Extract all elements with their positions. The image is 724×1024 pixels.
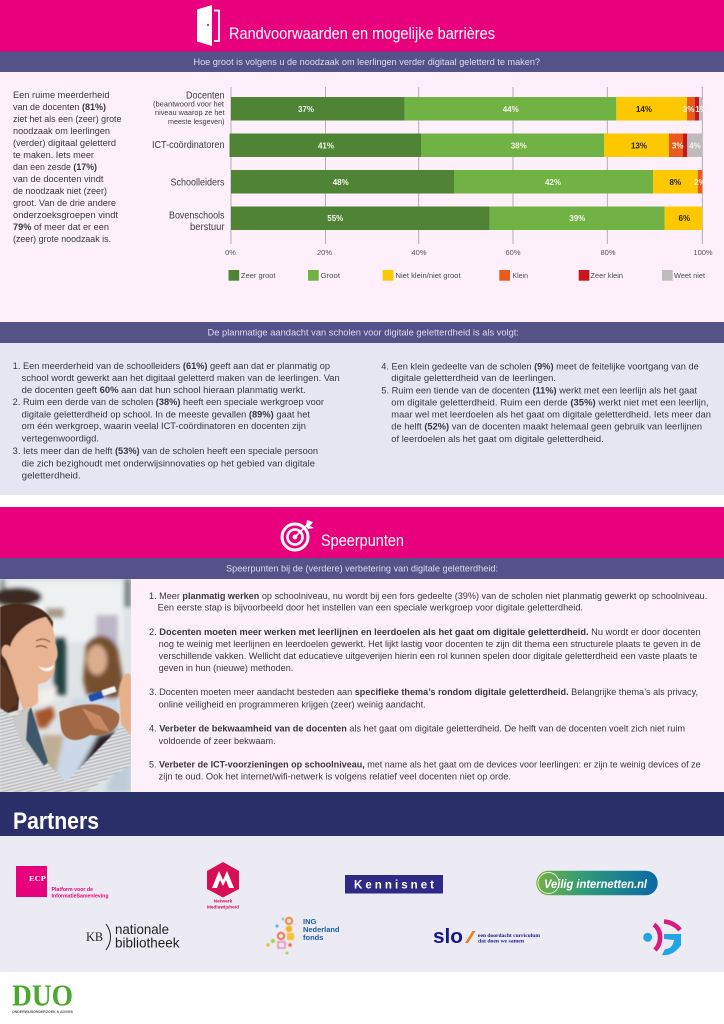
text block: points 1 to 3: digitale geletterdheid op school. In de meeste gevallen (89%) gaat het bbox=[22, 409, 311, 419]
bar: Docenten: 3% bbox=[683, 105, 694, 114]
icon: target with arrow bbox=[282, 520, 314, 550]
logo: Netwerk Mediawijsheid: Mediawijsheid bbox=[207, 904, 239, 910]
header: Partners bbox=[0, 792, 724, 836]
logo: Kennisnet: Kennisnet bbox=[354, 880, 434, 892]
bar: Docenten: 14% bbox=[636, 105, 652, 114]
text block: points 1 to 3: 3. Iets meer dan de helft (53%) van de scholen heeft een speciale persoon bbox=[13, 446, 318, 456]
text block: introduction: van de docenten (81%) bbox=[13, 102, 106, 112]
legend: Weet niet bbox=[674, 271, 706, 280]
point 1: Een eerste stap is bijvoorbeeld door het instellen van een speciale werkgroep voor digitale geletterdheid. bbox=[158, 603, 583, 613]
axis labels: 100% bbox=[693, 248, 713, 257]
point 3: 3. Docenten moeten meer aandacht besteden aan specifieke thema’s rondom digitale geletterdheid. Belangrijke thema’s als privacy, bbox=[149, 687, 698, 697]
bar: Docenten: 44% bbox=[503, 105, 519, 114]
subheading band: speerpunten bbox=[0, 558, 724, 579]
text block: points 4 and 5: of leerdoelen als het gaat om digitale geletterdheid. bbox=[391, 434, 604, 444]
row labels: meeste lesgeven) bbox=[168, 117, 225, 126]
panel: partner logos bbox=[0, 836, 724, 972]
heading: Randvoorwaarden en mogelijke barrières bbox=[229, 24, 495, 43]
text block: points 4 and 5: de helft (52%) van de docenten maakt helemaal geen gebruik van leerlijnen bbox=[391, 422, 702, 432]
axis labels: 60% bbox=[505, 248, 521, 257]
logo: ECP: Platform voor de bbox=[52, 887, 93, 893]
legend: Niet klein/niet groot bbox=[396, 271, 461, 280]
legend bbox=[228, 270, 706, 281]
text block: points 1 to 3: om één werkgroep, waarin veelal ICT-coördinatoren en docenten zijn bbox=[22, 421, 306, 431]
text block: points 4 and 5: maar wel met leerdoelen als het gaat om digitale geletterdheid. Iets meer dan bbox=[391, 409, 711, 419]
point 4: voldoende of zeer bekwaam. bbox=[159, 736, 276, 746]
row labels: niveau waarop ze het bbox=[155, 108, 225, 117]
photo: smiling student writing with a marker bbox=[0, 579, 131, 792]
axis labels: 0% bbox=[225, 248, 236, 257]
logo: Netwerk Mediawijsheid bbox=[207, 862, 239, 910]
point 5: zijn te oud. Ook het internet/wifi-netwerk is volgens relatief veel docenten niet op orde. bbox=[159, 772, 511, 782]
logo: ECP: InformatieSamenleving bbox=[52, 894, 109, 900]
text block: introduction: onderzoeksgroepen vindt bbox=[13, 210, 119, 220]
logo: Netwerk Mediawijsheid: Netwerk bbox=[214, 898, 233, 904]
point 3: online veiligheid en programmeren krijgen (zeer) weinig aandacht. bbox=[159, 699, 426, 709]
text block: introduction: (zeer) grote noodzaak is. bbox=[13, 234, 111, 244]
point 5: 5. Verbeter de ICT-voorzieningen op schoolniveau, met name als het gaat om de devices voor leerlingen: er zijn te weinig devices of ze bbox=[149, 760, 701, 770]
text block: points 4 and 5: 5. Ruim een tiende van de docenten (11%) werkt met een leerlijn als het gaat bbox=[381, 386, 698, 396]
logo: KB nationale bibliotheek: KB bbox=[86, 929, 103, 944]
subheading band: question: Hoe groot is volgens u de noodzaak om leerlingen verder digitaal geletterd te maken? bbox=[194, 57, 540, 68]
main girl bbox=[0, 604, 53, 713]
heading: Speerpunten bbox=[321, 531, 404, 550]
axis labels: 20% bbox=[317, 248, 332, 257]
text block: points 1 to 3: de docenten geeft 60% aan dat hun school hieraan planmatig werkt. bbox=[22, 385, 306, 395]
bar: Docenten bbox=[231, 97, 707, 120]
bar: Bovenschools bestuur bbox=[231, 206, 702, 230]
logo: SLO bbox=[433, 926, 541, 948]
header: Partners: Partners bbox=[13, 808, 99, 835]
subheading band: question bbox=[0, 52, 724, 72]
text block: introduction: de noodzaak niet (zeer) bbox=[13, 186, 107, 196]
logo: ECP bbox=[16, 866, 109, 900]
bar: Bovenschools bestuur: 39% bbox=[569, 214, 585, 223]
logo: ING Nederland fonds bbox=[266, 917, 340, 954]
text block: points 1 to 3: die zich bezighoudt met onderwijsinnovaties op het gebied van digitale bbox=[22, 458, 315, 468]
logo: ING Nederland fonds: ING bbox=[303, 917, 316, 926]
logo: KB nationale bibliotheek bbox=[86, 921, 180, 951]
bar: Docenten: 37% bbox=[298, 105, 314, 114]
text block: points 1 to 3: geletterdheid. bbox=[22, 470, 81, 480]
legend: Zeer klein bbox=[590, 271, 623, 280]
row labels bbox=[152, 90, 225, 233]
text block: introduction: noodzaak om leerlingen bbox=[13, 126, 110, 136]
bar: ICT-coördinatoren: 4% bbox=[689, 142, 701, 150]
bar: Docenten: 1% bbox=[695, 105, 707, 114]
text block: introduction: te maken. Iets meer bbox=[13, 150, 94, 160]
logo: DUO: ONDERWIJSONDERZOEK & ADVIES bbox=[12, 1010, 74, 1014]
text block: points 1 to 3: 1. Een meerderheid van de schoolleiders (61%) geeft aan dat er planmatig op bbox=[13, 361, 330, 371]
point 2: geven in hun (nieuwe) methoden. bbox=[159, 663, 293, 673]
row labels: Schoolleiders bbox=[170, 178, 224, 188]
bar: ICT-coördinatoren: 41% bbox=[318, 142, 334, 150]
point 3 bbox=[149, 687, 698, 709]
logo: Veilig internetten.nl: Veilig internetten.nl bbox=[544, 879, 648, 891]
subheading band: speerpunten: Speerpunten bij de (verdere) verbetering van digitale geletterdheid: bbox=[226, 564, 498, 574]
logo: Kennisnet bbox=[345, 875, 443, 894]
text block: speerpunten list bbox=[149, 591, 707, 782]
logo: SLO: slo bbox=[433, 926, 463, 948]
row labels: Bovenschools bbox=[169, 210, 224, 222]
text block: points 1 to 3 bbox=[13, 361, 340, 480]
logo: ING Nederland fonds: fonds bbox=[303, 933, 323, 942]
logo: DUO: DUO bbox=[12, 978, 73, 1013]
logo: ECP: ECP bbox=[29, 875, 47, 883]
logo: KB nationale bibliotheek: bibliotheek bbox=[115, 935, 180, 951]
background: section 1 panel bbox=[0, 72, 724, 322]
logo: DG mark bbox=[643, 922, 681, 955]
text block: points 4 and 5: 4. Een klein gedeelte van de scholen (9%) meet de feitelijke voortgang van de bbox=[381, 362, 699, 372]
text block: introduction: dan een zesde (17%) bbox=[13, 162, 97, 172]
subheading band: planmatige aandacht: De planmatige aandacht van scholen voor digitale geletterdheid is als volgt: bbox=[208, 328, 519, 338]
axis labels bbox=[225, 248, 713, 257]
point 4: 4. Verbeter de bekwaamheid van de docenten als het gaat om digitale geletterdheid. De helft van de docenten voelt zich niet ruim bbox=[149, 724, 685, 734]
bar: ICT-coördinatoren bbox=[230, 134, 702, 157]
text block: points 1 to 3: vertegenwoordigd. bbox=[22, 433, 99, 443]
text block: introduction: van de docenten vindt bbox=[13, 174, 104, 184]
axis labels: 80% bbox=[600, 248, 616, 257]
point 2: nog te weinig met leerlijnen en leerdoelen gewerkt. Het lijkt lastig voor docenten te zijn dit thema een structurele plaats te geven in de bbox=[159, 639, 701, 649]
point 1 bbox=[149, 591, 707, 613]
bar: Bovenschools bestuur: 55% bbox=[327, 214, 343, 223]
text block: points 1 to 3: 2. Ruim een derde van de scholen (38%) heeft een speciale werkgroep voor bbox=[13, 397, 324, 407]
text block: introduction: ziet het als een (zeer) grote bbox=[13, 114, 122, 124]
point 1: 1. Meer planmatig werken op schoolniveau, nu wordt bij een fors gedeelte (39%) van de scholen niet planmatig gewerkt op schoolniveau. bbox=[149, 591, 707, 601]
legend: Klein bbox=[512, 271, 528, 280]
subheading band: planmatige aandacht bbox=[0, 322, 724, 343]
legend: Groot bbox=[320, 271, 341, 280]
bar: Bovenschools bestuur: 6% bbox=[679, 214, 690, 223]
axis labels: 40% bbox=[411, 248, 427, 257]
logo: KB nationale bibliotheek: nationale bbox=[115, 921, 169, 937]
bar: Schoolleiders: 48% bbox=[333, 178, 349, 187]
text block: points 4 and 5: om digitale geletterdheid. Ruim een derde (35%) werkt niet met een leerlijn, bbox=[391, 398, 709, 408]
legend: Zeer groot bbox=[241, 271, 276, 280]
text block: points 4 and 5 bbox=[381, 362, 711, 444]
row labels: ICT-coördinatoren bbox=[152, 140, 224, 151]
bar: Schoolleiders: 42% bbox=[545, 178, 561, 187]
bar: ICT-coördinatoren: 13% bbox=[631, 142, 647, 150]
logo: SLO: dat doen we samen bbox=[478, 940, 524, 944]
point 4 bbox=[149, 724, 685, 746]
row labels: (beantwoord voor het bbox=[153, 100, 225, 108]
text block: introduction: Een ruime meerderheid bbox=[13, 90, 110, 100]
logo: ING Nederland fonds: Nederland bbox=[303, 925, 340, 934]
text block: introduction bbox=[13, 90, 122, 244]
text block: introduction: groot. Van de drie andere bbox=[13, 198, 116, 208]
row labels: berstuur bbox=[190, 222, 225, 233]
stacked bar chart: noodzaak bbox=[152, 87, 713, 281]
row labels: Docenten bbox=[186, 90, 224, 102]
bar: ICT-coördinatoren: 3% bbox=[672, 142, 683, 150]
point 5 bbox=[149, 760, 701, 782]
text block: points 1 to 3: school wordt gewerkt aan het digitaal geletterd maken van de leerlingen. Van bbox=[22, 373, 340, 383]
panel: speerpunten background bbox=[0, 579, 724, 792]
header: Randvoorwaarden en mogelijke barrières bbox=[0, 0, 724, 52]
point 2: 2. Docenten moeten meer werken met leerlijnen en leerdoelen als het gaat om digitale geletterdheid. Nu wordt er door docenten bbox=[149, 627, 701, 637]
panel: planmatige aandacht bbox=[0, 343, 724, 495]
bar: Schoolleiders: 8% bbox=[670, 178, 681, 187]
icon: open door bbox=[197, 5, 219, 46]
logo: SLO: een doordacht curriculum bbox=[478, 934, 541, 939]
point 2: verschillende vakken. Wellicht dat educatieve uitgeverijen hierin een rol kunnen spelen door digitale geletterdheid een vaste plaats te bbox=[159, 651, 697, 661]
bar: Schoolleiders: 2% bbox=[694, 178, 706, 187]
logo: Veilig internetten.nl bbox=[536, 871, 658, 895]
text block: introduction: (verder) digitaal geletterd bbox=[13, 138, 116, 148]
bar: ICT-coördinatoren: 38% bbox=[511, 142, 527, 150]
text block: points 4 and 5: digitale geletterdheid van de leerlingen. bbox=[391, 373, 556, 383]
header: Speerpunten bbox=[0, 507, 724, 558]
text block: introduction: 79% of meer dat er een bbox=[13, 222, 109, 232]
bar: Schoolleiders bbox=[231, 170, 706, 194]
point 2 bbox=[149, 627, 701, 673]
